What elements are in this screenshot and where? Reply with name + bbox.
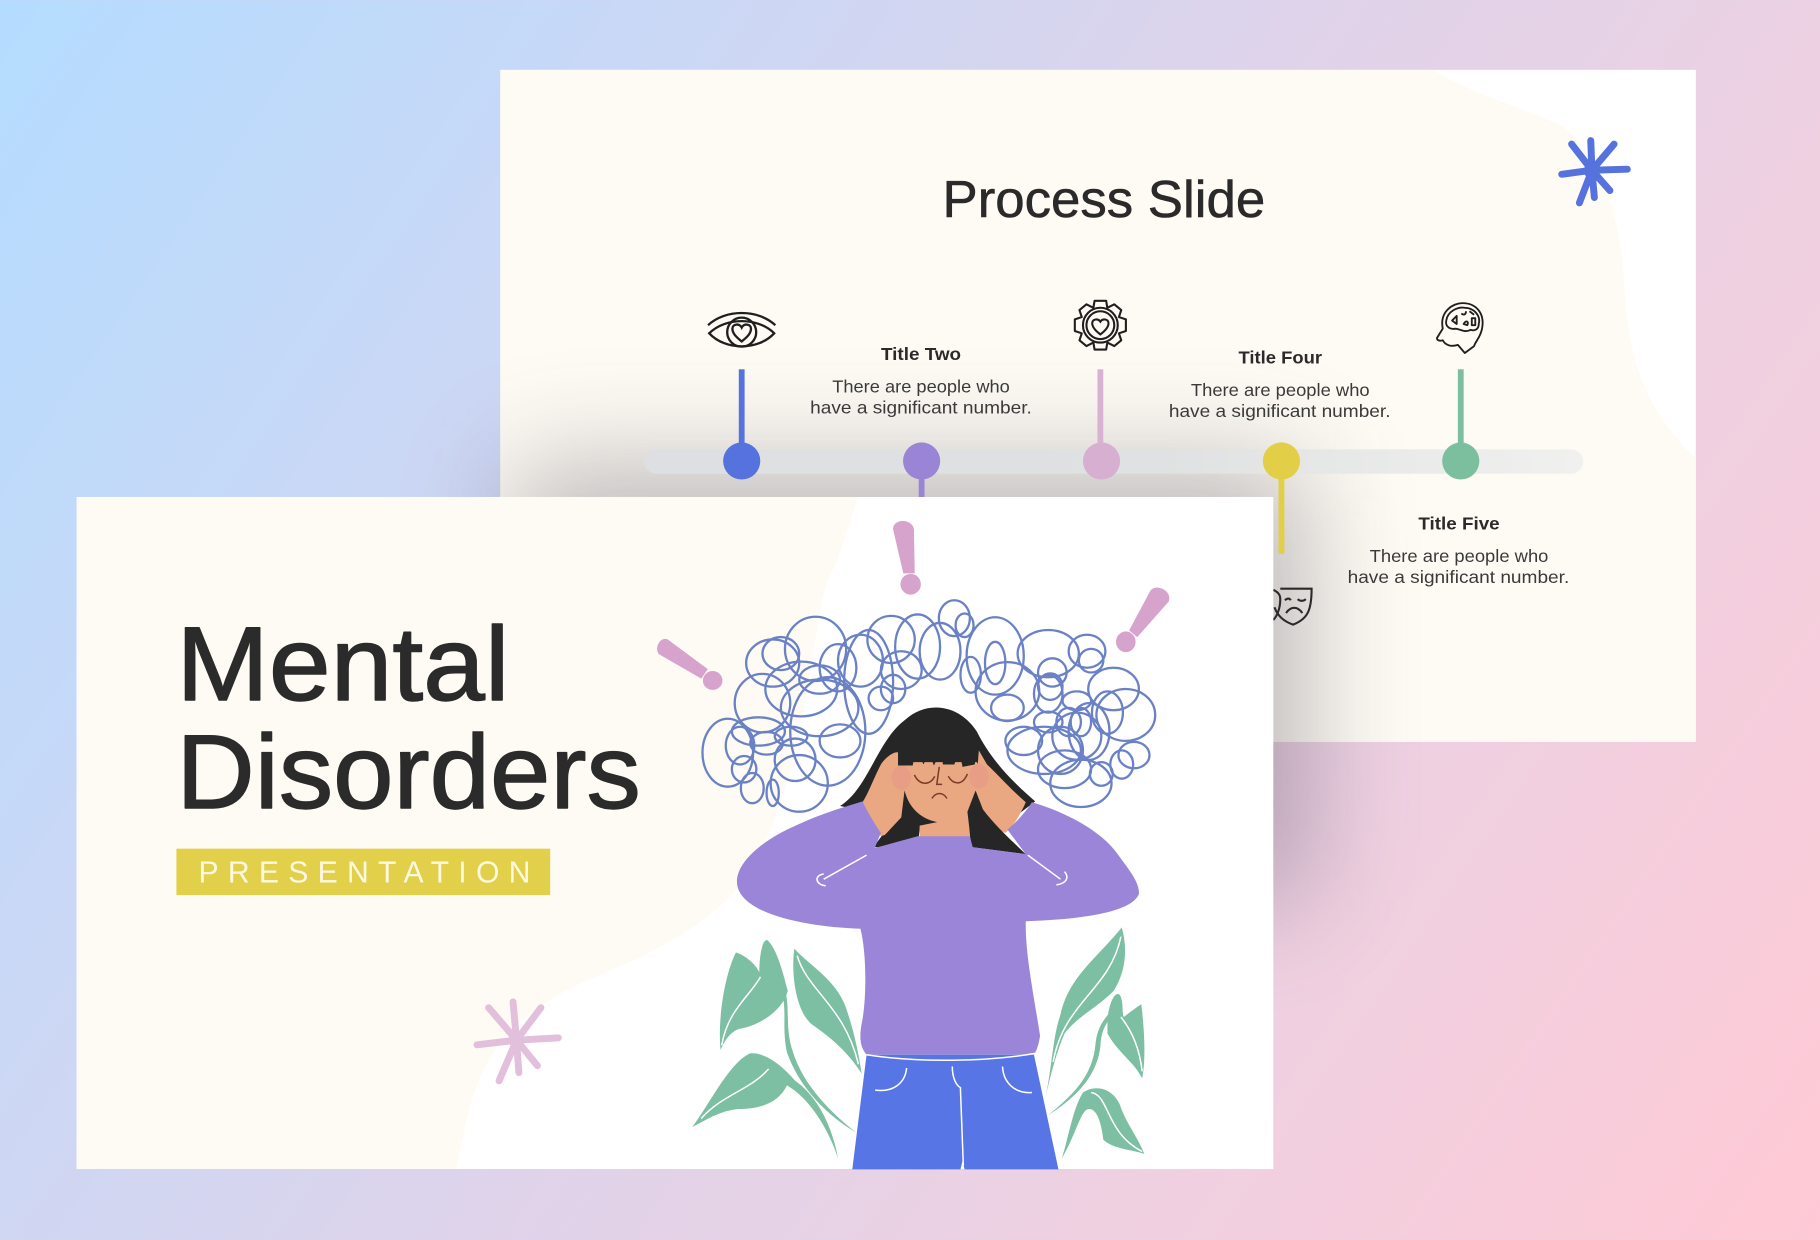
timeline track xyxy=(644,449,1583,474)
subtitle badge: PRESENTATION xyxy=(198,856,530,889)
title: Mental xyxy=(176,606,510,723)
slide base xyxy=(77,497,1273,1169)
title four text xyxy=(1169,347,1391,421)
title four text: There are people who xyxy=(1191,380,1370,400)
title five text: Title Five xyxy=(1418,513,1500,533)
icon: eye with heart xyxy=(708,313,775,347)
leaf veins xyxy=(701,937,1142,1152)
step 2: title two xyxy=(810,344,1032,511)
scribble thought cloud xyxy=(702,600,1155,812)
sweater xyxy=(737,801,1139,1055)
stem and node xyxy=(903,442,940,511)
title two text: have a significant number. xyxy=(810,397,1032,417)
leaves xyxy=(692,927,1144,1159)
sleeve creases xyxy=(817,855,1067,886)
title five text xyxy=(1348,513,1569,587)
title: Disorders xyxy=(176,714,641,831)
title four text: Title Four xyxy=(1238,347,1322,367)
icon: head with brain xyxy=(1437,303,1483,353)
stem and node xyxy=(1442,369,1479,480)
stem and node xyxy=(1263,442,1300,554)
panel: process slide xyxy=(500,70,1696,900)
hair fringe and side strands xyxy=(874,726,1026,854)
drop shadow of front slide xyxy=(511,464,1306,900)
hair back xyxy=(840,707,1035,854)
heading: process slide: Process Slide xyxy=(943,171,1265,229)
icon: blue asterisk xyxy=(1562,141,1627,203)
face, neck and hands xyxy=(862,750,1026,838)
cream blob xyxy=(500,70,1696,742)
title five text: have a significant number. xyxy=(1348,567,1569,587)
stem and node xyxy=(1083,369,1120,480)
face details xyxy=(914,767,967,798)
title four text: have a significant number. xyxy=(1169,401,1391,421)
cream blob xyxy=(77,497,858,1169)
jeans seams xyxy=(867,1053,1035,1166)
title two text: Title Two xyxy=(881,344,961,364)
title five text: There are people who xyxy=(1370,546,1548,566)
title two text xyxy=(810,344,1032,417)
jeans xyxy=(852,1055,1058,1169)
icon: theatre masks xyxy=(1273,589,1312,625)
slide base xyxy=(500,70,1696,742)
exclamation marks xyxy=(657,521,1169,690)
step 4: title four xyxy=(1169,347,1391,625)
title two text: There are people who xyxy=(832,376,1010,396)
subtitle badge xyxy=(176,849,550,895)
panel: mental disorders title slide xyxy=(77,497,1273,1169)
icon: pink asterisk xyxy=(477,1002,558,1081)
title xyxy=(176,606,641,831)
step 3: gear icon and node xyxy=(1075,301,1126,480)
step 5: brain icon, node and title five xyxy=(1348,303,1569,587)
icon: gear with heart xyxy=(1075,301,1126,350)
illustration: stressed woman xyxy=(657,521,1169,1169)
step 1: eye icon and node xyxy=(708,313,775,480)
stem and node xyxy=(723,369,760,480)
